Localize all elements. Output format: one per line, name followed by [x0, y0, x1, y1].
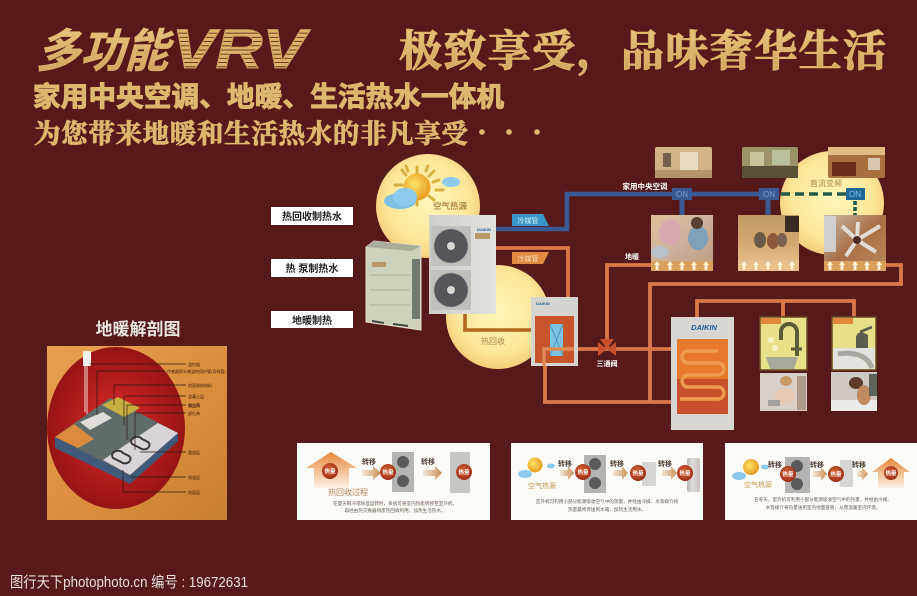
ON switch 2	[759, 188, 779, 200]
process text: 在夏天制冷或除湿运转时，系统可将室内热能转移至室外机，	[333, 500, 457, 507]
transfer 2: 转移	[810, 460, 824, 469]
process heading: 热回收过程	[328, 487, 368, 497]
panel: heat recovery process: 再经由热交换器将废热回收利用，加热生活热水。	[344, 507, 446, 514]
pipe: heat recovery link	[465, 312, 532, 330]
sun icon	[743, 459, 759, 475]
panel: heat pump hot water: 热量	[679, 469, 691, 477]
transfer 1: 转移	[558, 459, 572, 468]
indoor unit with heat ball	[840, 460, 853, 487]
heading: floor heating anatomy: 地暖解剖图	[96, 319, 180, 339]
unit with heat ball	[785, 457, 810, 493]
part labels: 温控器	[188, 361, 200, 367]
heat recovery indoor unit: DAIKIN	[536, 301, 550, 306]
faucet illustration 2	[832, 317, 876, 370]
transfer 3: 转移	[658, 459, 672, 468]
room photo: top 1	[655, 147, 712, 178]
panel: heat pump hot water: 热量最终传送到水箱，加热生活用水。	[568, 506, 646, 513]
glow circle: heat recovery	[446, 265, 550, 369]
panel: floor heating process: 热量	[885, 469, 897, 477]
pipe: inverter dashed link	[781, 194, 855, 216]
title: slogan: 极致享受，品味奢华生活	[399, 28, 886, 76]
OFF switch	[846, 188, 865, 200]
panel: floor heating process: 水等媒介将热量送到室内地面盘管，从而温暖室内环境。	[766, 504, 880, 511]
mode label: 热回收制热水	[271, 207, 353, 225]
panel: heat pump hot water: 热量	[577, 468, 589, 476]
part labels: 传感器探头感温的保护管(导线管)	[167, 368, 226, 374]
part labels: 混凝土层	[188, 393, 204, 399]
unit with heat ball	[584, 455, 606, 493]
panel: heat pump hot water: 热量	[632, 469, 644, 477]
hot water tank	[671, 317, 734, 430]
part labels: 绑扎带	[188, 410, 200, 416]
outdoor heat pump unit with two fans	[429, 215, 496, 314]
description: 室外机可利用小部分能源吸收空气中的热量，并经由冷媒、水等媒介将	[536, 498, 679, 505]
unit with heat ball	[392, 452, 414, 492]
tag: refrigerant pipe orange: 冷媒管	[518, 254, 538, 263]
panel: heat recovery process: 热量	[324, 467, 336, 475]
label: floor heating: 地暖	[625, 252, 639, 261]
watermark: 图行天下photophoto.cn 编号 : 19672631	[10, 574, 248, 591]
part labels: 地面层	[188, 489, 200, 495]
label: home central air conditioning: 家用中央空调	[622, 181, 668, 191]
faucet illustration 1	[760, 317, 807, 370]
panel: floor heating process: 热量	[782, 470, 794, 478]
transfer 2: 转移	[610, 459, 624, 468]
tag: refrigerant pipe orange	[512, 252, 549, 264]
red ellipse	[47, 347, 185, 509]
part labels: 管道层	[188, 449, 200, 455]
icon: sun and clouds	[384, 166, 460, 209]
room photo: top 3	[828, 147, 885, 178]
transfer 1: 转移	[362, 457, 376, 466]
pipes: refrigerant blue	[494, 194, 768, 229]
panel: floor heating anatomy	[47, 346, 227, 520]
subtitle line 1: 家用中央空调、地暖、生活热水一体机	[33, 81, 504, 112]
ON switch 1	[672, 188, 692, 200]
pipes: hot water orange	[494, 248, 901, 402]
transfer 1: 转移	[768, 460, 782, 469]
mode label: 地暖制热: 地暖制热	[292, 314, 332, 327]
panel: heat recovery process: 热量	[382, 468, 394, 476]
tag: refrigerant pipe blue: 冷媒管	[518, 216, 538, 225]
mode label: 热泵制热水: 热 泵制热水	[286, 262, 338, 275]
outdoor heat pump unit with two fans: DAIKIN	[477, 227, 491, 232]
title: 多功能VRV: 多功能	[33, 26, 180, 77]
leader lines	[90, 364, 186, 492]
tank with heat ball	[687, 458, 700, 492]
panel: floor heating process	[725, 443, 917, 520]
large VRV outdoor unit	[366, 241, 421, 330]
panel: heat recovery process: 热量	[458, 468, 470, 476]
title: 多功能VRV	[33, 17, 311, 80]
tag: refrigerant pipe blue	[512, 214, 549, 226]
heat recovery indoor unit	[531, 297, 578, 366]
mode label: 地暖制热	[271, 311, 353, 328]
transfer 3: 转移	[852, 460, 866, 469]
label: heat recovery: 热回收	[481, 336, 505, 346]
label: DC inverter: 直流变频	[810, 178, 842, 188]
sun icon	[528, 458, 542, 472]
floor heating photo 2	[738, 215, 799, 271]
transfer 2: 转移	[421, 457, 435, 466]
house with heat ball	[306, 452, 357, 488]
part labels	[167, 361, 226, 495]
photo: child washing	[760, 373, 807, 411]
label: air heat source: 空气热源	[433, 201, 467, 211]
house with heat ball	[872, 458, 910, 488]
thermostat	[83, 351, 91, 414]
part labels: 地面装饰材料	[188, 382, 212, 388]
panel: floor heating process: 空气热源	[744, 480, 772, 489]
tank with heat ball	[450, 452, 470, 493]
ON switch 2: ON	[763, 190, 775, 199]
panel: floor heating process: 热量	[830, 470, 842, 478]
floor heating photo 1	[651, 215, 713, 271]
glow circle: DC inverter	[780, 151, 884, 255]
indoor unit with heat ball	[642, 462, 656, 486]
title: 多功能VRV: VRV	[172, 17, 311, 80]
photo: woman washing	[831, 372, 877, 411]
part labels: 钢丝网	[188, 402, 200, 408]
ON switch 1: ON	[676, 190, 688, 199]
panel: heat recovery process	[297, 443, 490, 520]
three-way valve	[598, 339, 616, 356]
hot water tank: DAIKIN	[691, 323, 717, 332]
description: 在冬天，室外机可利用小部分能源吸收空气中的热量，并经由冷媒、	[754, 496, 892, 503]
subtitle line 2: 为您带来地暖和生活热水的非凡享受	[34, 119, 468, 149]
OFF switch: ON	[849, 190, 861, 199]
panel: heat pump hot water	[511, 443, 703, 520]
mode label: 热泵制热水	[271, 259, 353, 277]
mode label: 热回收制热水: 热回收制热水	[282, 210, 342, 223]
part labels: 保温层	[188, 474, 200, 480]
room photo: top 2	[742, 147, 798, 178]
panel: heat pump hot water: 空气热源	[528, 481, 556, 490]
glow circle: air heat source	[376, 154, 480, 258]
label: three-way valve: 三通阀	[596, 359, 618, 368]
floor heating photo 3	[824, 215, 886, 271]
slab cutaway	[55, 397, 178, 484]
